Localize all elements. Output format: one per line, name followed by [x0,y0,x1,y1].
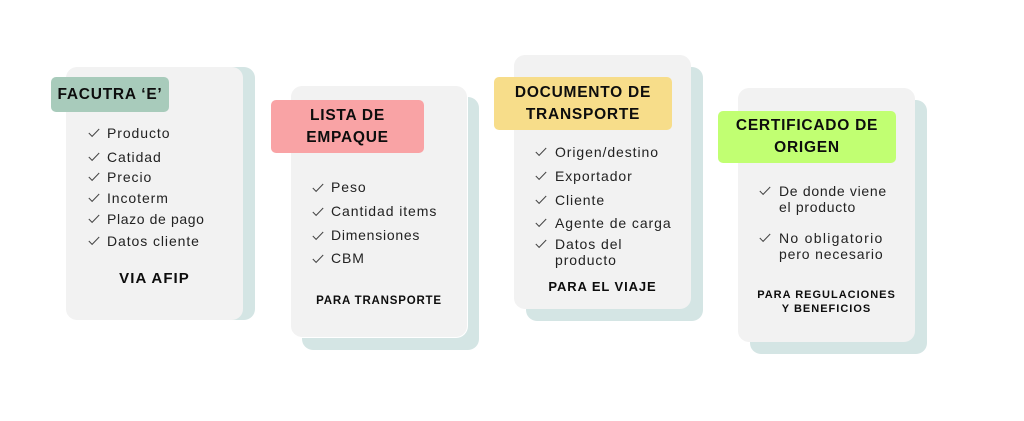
card shadow [526,67,703,321]
card shadow [80,67,255,320]
checklist item: Peso: Peso [331,179,367,195]
checklist item: Datos cliente: Datos cliente [107,233,200,249]
heading: Certificado de origen [718,111,896,163]
footer: Para regulaciones y beneficios: Y BENEFICIOS [782,303,871,315]
checklist item: Incoterm: Incoterm [107,190,169,206]
card body [291,86,467,337]
panel: factura E [51,67,255,320]
heading: Lista de empaque [271,100,424,153]
checklist item: Datos del producto: Datos del [555,236,622,252]
checklist item: De donde viene el producto: el producto [779,199,856,215]
checklist item: Catidad: Catidad [107,149,162,165]
panel: certificado de origen [718,88,927,354]
checklist item: Cliente: Cliente [555,192,605,208]
card body [66,67,243,320]
heading: Facutra E [51,77,169,112]
panel: lista de empaque [271,86,479,350]
card shadow [302,97,479,350]
footer: Para regulaciones y beneficios [757,289,896,315]
footer: Para regulaciones y beneficios: PARA REGULACIONES [757,289,896,301]
checklist item: Precio: Precio [107,169,152,185]
heading: Certificado de origen: ORIGEN [774,139,840,156]
checklist item: No obligatorio pero necesario [760,230,884,262]
card shadow [750,100,927,354]
checklist item: No obligatorio pero necesario: No obligatorio [779,230,884,246]
heading: Certificado de origen: CERTIFICADO DE [736,117,878,134]
checklist item: Plazo de pago: Plazo de pago [107,211,205,227]
card body [514,55,691,309]
footer: Para transporte: PARA TRANSPORTE [316,295,442,307]
footer: Via AFIP: VIA AFIP [119,270,190,287]
checklist item: Peso [312,179,367,195]
checklist item: No obligatorio pero necesario: pero necesario [779,246,884,262]
heading: Documento de transporte: TRANSPORTE [526,106,640,123]
checklist item: De donde viene el producto: De donde viene [779,183,887,199]
checklist item: CBM: CBM [331,250,365,266]
checklist item: De donde viene el producto [760,183,887,215]
heading: Documento de transporte [494,77,672,130]
card body [738,88,915,342]
heading: Lista de empaque: EMPAQUE [306,129,389,146]
checklist item: Datos del producto [536,236,622,268]
checklist item: Cantidad items: Cantidad items [331,203,437,219]
checklist item: CBM [312,250,365,266]
checklist item: Dimensiones: Dimensiones [331,227,420,243]
heading: Lista de empaque: LISTA DE [310,107,385,124]
checklist item: Datos del producto: producto [555,252,617,268]
checklist item: Agente de carga: Agente de carga [555,215,672,231]
checklist item: Exportador: Exportador [555,168,633,184]
heading: Documento de transporte: DOCUMENTO DE [515,84,651,101]
checklist item: Producto: Producto [107,125,170,141]
panel: documento de transporte [494,55,703,321]
heading: Facutra E: FACUTRA ‘E’ [58,86,162,103]
checklist item: Origen/destino: Origen/destino [555,144,659,160]
footer: Para el viaje: PARA EL VIAJE [548,279,657,294]
